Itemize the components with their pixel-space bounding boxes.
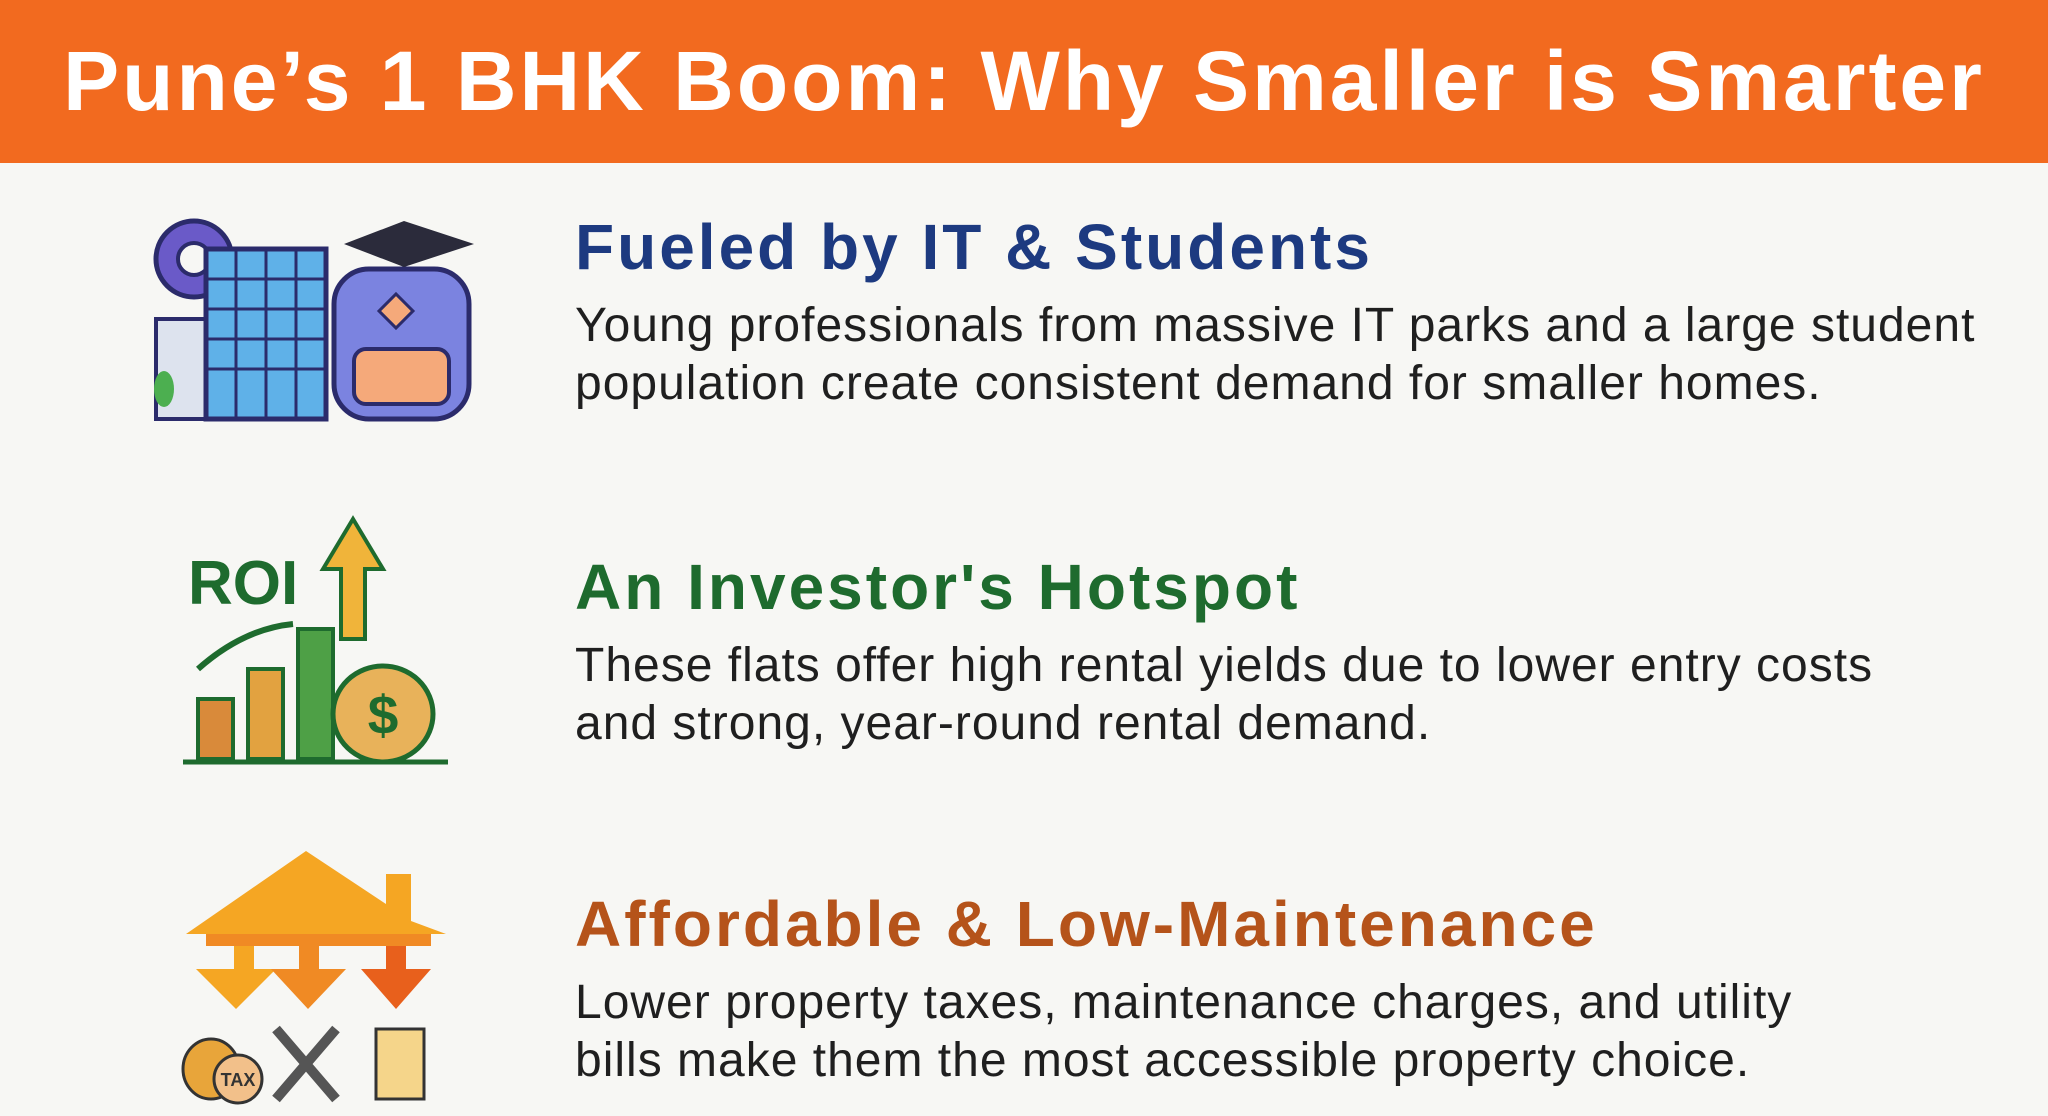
section: Affordable (575, 888, 1792, 1087)
title: Pune’s 1 BHK Boom: Why Smaller is Smarter (63, 34, 1985, 128)
icon: IT building and backpack (154, 218, 474, 422)
section: IT & Students (575, 211, 1975, 410)
body text: Young professionals from massive IT parks and a large student (575, 299, 1975, 352)
icon: ROI chart (183, 515, 448, 764)
icon: house with cost arrows: TAX (221, 1070, 255, 1090)
section: Investor (575, 551, 1873, 750)
icon: house with cost arrows (182, 851, 446, 1104)
title (0, 0, 2048, 163)
body text: These flats offer high rental yields due to lower entry costs (575, 639, 1873, 692)
body text: bills make them the most accessible property choice. (575, 1034, 1750, 1087)
body text: population create consistent demand for smaller homes. (575, 357, 1822, 410)
icon: ROI chart: ROI (188, 549, 298, 618)
heading: Affordable & Low-Maintenance (575, 888, 1598, 960)
body text (575, 639, 1873, 750)
body text: and strong, year-round rental demand. (575, 697, 1431, 750)
body text: Lower property taxes, maintenance charges, and utility (575, 976, 1792, 1029)
heading: Fueled by IT & Students (575, 211, 1373, 283)
icon: ROI chart: $ (368, 684, 398, 746)
heading: An Investor's Hotspot (575, 551, 1300, 623)
body text (575, 976, 1792, 1087)
body text (575, 299, 1975, 410)
